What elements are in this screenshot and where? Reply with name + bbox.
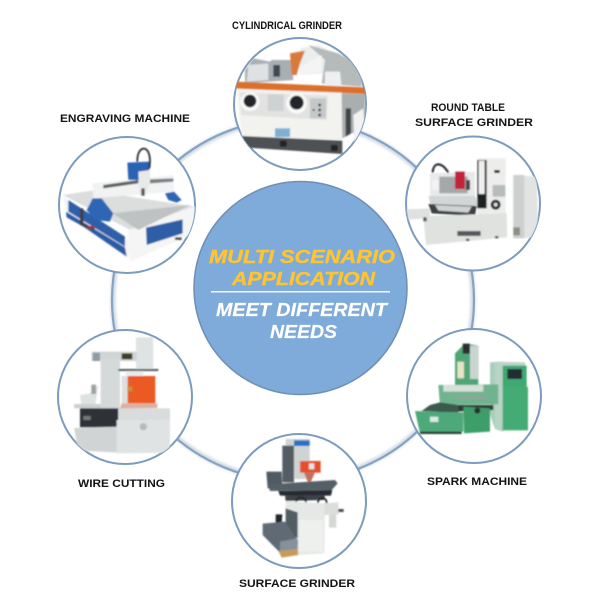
central circle [194, 182, 407, 394]
machine image: wire cutting [74, 337, 170, 453]
central heading: multi scenario application [209, 246, 396, 289]
panel: engraving machine [59, 137, 195, 273]
central subheading: meet different needs: NEEDS [270, 321, 338, 342]
label: surface grinder: SURFACE GRINDER [239, 578, 355, 590]
panel: round table surface grinder [406, 136, 540, 270]
panel: wire cutting [58, 330, 192, 464]
machine image: engraving machine [63, 149, 195, 262]
label: cylindrical grinder: CYLINDRICAL GRINDER [232, 20, 342, 32]
label: round table surface grinder: SURFACE GRINDER [415, 117, 533, 129]
machine image: cylindrical grinder [235, 45, 367, 154]
connecting ring [112, 119, 474, 481]
machine image: surface grinder [263, 439, 344, 558]
central subheading: meet different needs [216, 299, 389, 342]
machine image: spark machine [415, 343, 528, 434]
central subheading: meet different needs: MEET DIFFERENT [216, 299, 389, 320]
divider line [211, 291, 390, 292]
central heading: multi scenario application: MULTI SCENARIO [209, 246, 396, 267]
panel: surface grinder [232, 434, 366, 568]
label: round table surface grinder: ROUND TABLE [431, 102, 505, 114]
label: engraving machine: ENGRAVING MACHINE [60, 113, 190, 125]
label: round table surface grinder [415, 102, 533, 129]
label: wire cutting: WIRE CUTTING [78, 478, 165, 490]
panel: cylindrical grinder [234, 38, 367, 170]
panel: spark machine [407, 329, 541, 463]
central heading: multi scenario application: APPLICATION [231, 268, 376, 289]
machine image: round table surface grinder [407, 158, 538, 245]
label: spark machine: SPARK MACHINE [427, 476, 527, 488]
